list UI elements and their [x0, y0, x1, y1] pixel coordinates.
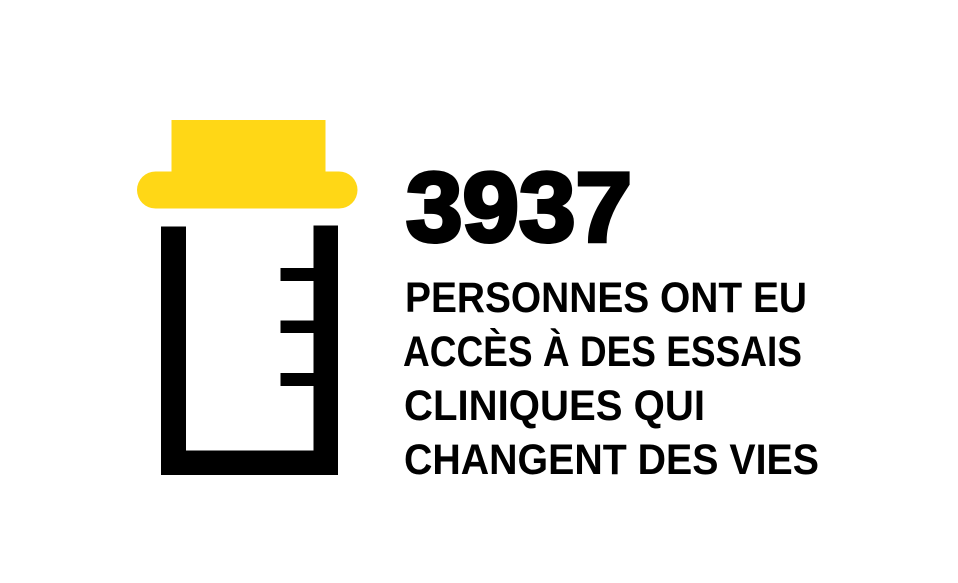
- description text: CLINIQUES QUI: [404, 382, 705, 430]
- icon: specimen jar: [137, 120, 358, 475]
- description text: PERSONNES ONT EU: [405, 274, 807, 322]
- description text: ACCÈS À DES ESSAIS: [403, 328, 802, 376]
- description text: CHANGENT DES VIES: [404, 436, 819, 484]
- jar lid: [137, 120, 358, 208]
- statistic number: 3937: [406, 152, 632, 262]
- description text: [403, 274, 819, 484]
- jar body with graduations: [161, 226, 338, 475]
